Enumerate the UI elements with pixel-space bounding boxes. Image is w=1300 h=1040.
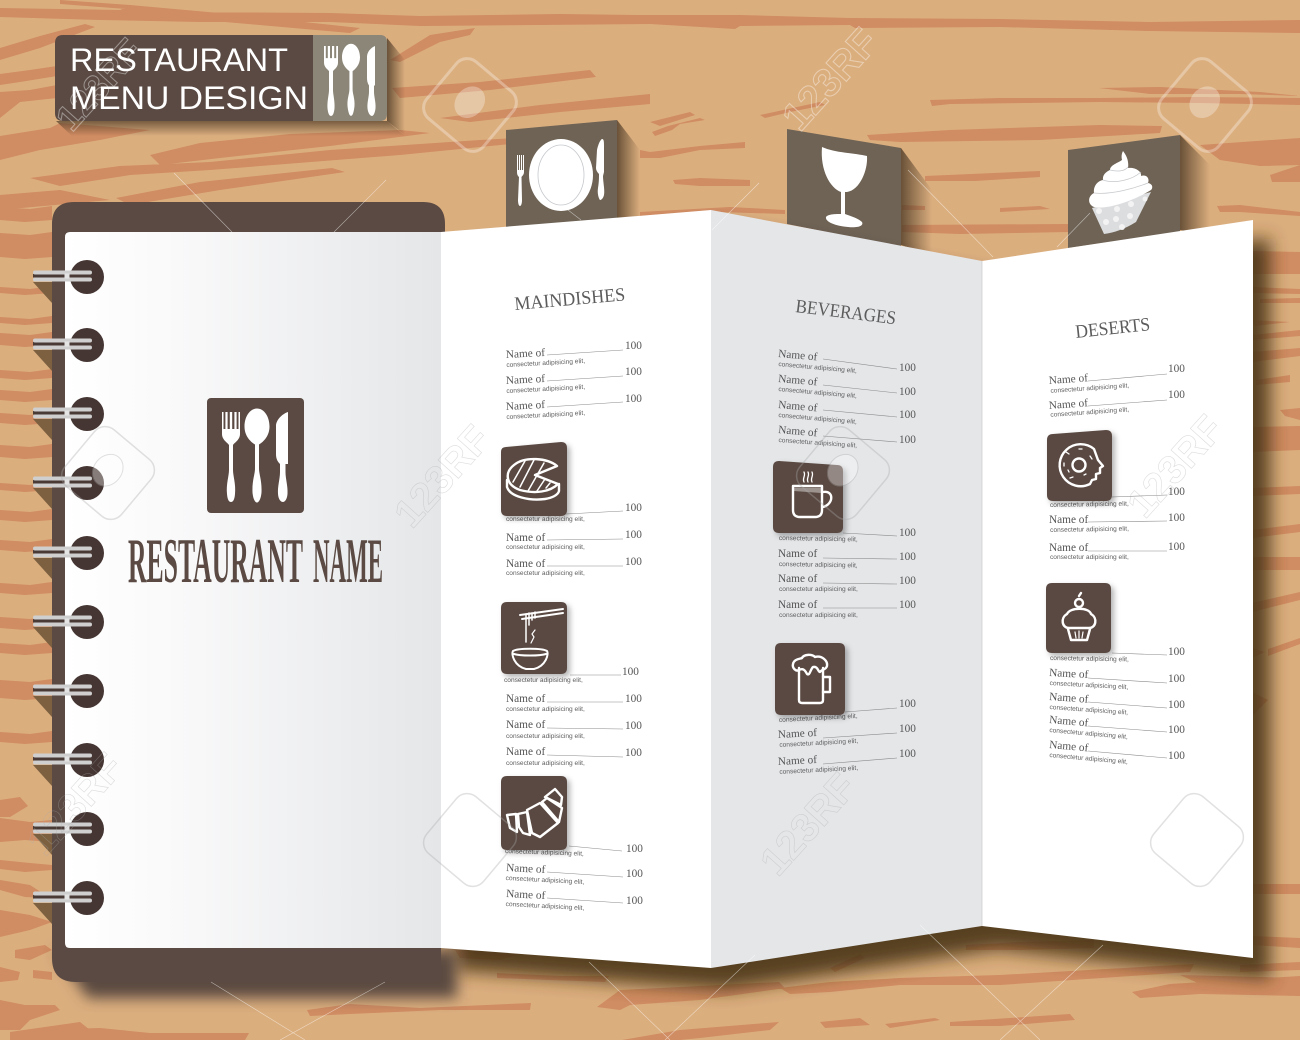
menu item: Name of xyxy=(778,399,818,414)
menu item xyxy=(506,340,642,369)
ring 10 xyxy=(33,881,104,924)
menu item xyxy=(1049,714,1185,741)
ring 3 xyxy=(33,397,104,440)
menu item: 100 xyxy=(626,895,643,907)
menu item: 100 xyxy=(1168,363,1185,375)
menu item: 100 xyxy=(899,748,916,760)
menu item: consectetur adipisicing elit, xyxy=(506,384,585,395)
menu item: consectetur adipisicing elit, xyxy=(778,437,857,450)
menu item: Name of xyxy=(506,888,546,902)
menu item: Name of xyxy=(1049,739,1089,754)
tab: desserts xyxy=(1068,135,1180,248)
menu item: consectetur adipisicing elit, xyxy=(1050,655,1129,663)
watermark egg xyxy=(1145,788,1249,892)
menu item xyxy=(506,529,642,551)
menu item xyxy=(505,888,643,912)
menu item: Name of xyxy=(1049,514,1088,526)
tab shadows xyxy=(617,120,1210,255)
menu item: Name of xyxy=(506,693,545,705)
cover logo xyxy=(207,398,304,513)
heading: beverages: BEVERAGES xyxy=(794,296,897,329)
menu item: 100 xyxy=(899,551,916,563)
watermark text: 123RF xyxy=(1119,407,1232,526)
icon tile: coffee xyxy=(773,461,843,533)
menu item xyxy=(506,366,642,395)
restaurant name: RESTAURANT xyxy=(128,526,303,596)
icon tile: noodles xyxy=(501,602,567,674)
menu item: Name of xyxy=(778,348,818,363)
menu item: 100 xyxy=(1168,512,1185,524)
menu item: 100 xyxy=(899,599,916,611)
menu item xyxy=(505,862,643,886)
menu item: consectetur adipisicing elit, xyxy=(779,612,858,619)
menu cover: NAME xyxy=(313,526,383,596)
tab: beverages xyxy=(787,129,901,247)
icon tile: beer xyxy=(775,643,845,715)
watermark text: 123RF xyxy=(47,31,150,138)
menu item: Name of xyxy=(1049,714,1089,729)
shadow: cover xyxy=(58,950,457,998)
menu item xyxy=(1049,691,1185,717)
watermark egg xyxy=(791,421,895,525)
menu item xyxy=(506,719,642,740)
menu item: Name of xyxy=(1049,667,1089,681)
menu item: 100 xyxy=(899,386,916,398)
menu item: 100 xyxy=(1168,724,1185,736)
menu item xyxy=(778,748,916,776)
watermarks xyxy=(19,20,1257,892)
menu item: consectetur adipisicing elit, xyxy=(1050,526,1129,534)
menu item: consectetur adipisicing elit, xyxy=(506,760,585,767)
shadow: folded panels xyxy=(455,228,1270,990)
menu item xyxy=(1049,739,1185,766)
menu item: Name of xyxy=(506,373,546,387)
menu item: consectetur adipisicing elit, xyxy=(1049,727,1128,741)
menu item: Name of xyxy=(1049,542,1088,554)
menu item: 100 xyxy=(626,843,643,855)
menu item: 100 xyxy=(899,362,916,374)
title text: MENU DESIGN xyxy=(70,80,308,116)
menu item: 100 xyxy=(625,747,642,759)
menu item: 100 xyxy=(899,434,916,446)
heading: desserts: DESERTS xyxy=(1074,314,1151,343)
menu item: consectetur adipisicing elit, xyxy=(1049,752,1128,766)
menu item: consectetur adipisicing elit, xyxy=(779,535,858,543)
menu item: consectetur adipisicing elit, xyxy=(506,706,585,713)
menu item: 100 xyxy=(899,723,916,735)
icon tile: croissant xyxy=(501,776,567,850)
watermark text: 123RF xyxy=(774,20,887,139)
menu item: 100 xyxy=(625,502,642,514)
menu item: consectetur adipisicing elit, xyxy=(505,875,585,886)
menu item xyxy=(506,502,642,523)
menu item xyxy=(506,556,642,577)
menu item xyxy=(1049,667,1185,691)
ring 2 xyxy=(33,328,104,371)
menu item: Name of xyxy=(778,548,817,560)
menu item: Name of xyxy=(506,347,546,361)
icon: wine glass xyxy=(822,147,867,227)
icon tile: cupcake xyxy=(1046,583,1111,653)
menu item: consectetur adipisicing elit, xyxy=(506,358,585,369)
menu item: consectetur adipisicing elit, xyxy=(506,516,585,523)
menu item xyxy=(506,746,642,767)
menu item: consectetur adipisicing elit, xyxy=(779,586,858,593)
menu item xyxy=(1050,486,1185,509)
menu item: 100 xyxy=(899,575,916,587)
menu item xyxy=(778,573,916,593)
spiral rings xyxy=(33,260,104,924)
menu item xyxy=(778,548,916,569)
menu item: consectetur adipisicing elit, xyxy=(1050,501,1129,509)
shadow: title banner xyxy=(56,38,405,136)
menu item: Name of xyxy=(506,558,545,570)
menu item: 100 xyxy=(625,556,642,568)
menu item xyxy=(506,693,642,713)
ring 7 xyxy=(33,674,104,717)
menu item xyxy=(504,666,639,684)
menu item xyxy=(778,399,916,426)
menu item: consectetur adipisicing elit, xyxy=(504,677,583,684)
panel: desserts xyxy=(982,220,1253,958)
menu item xyxy=(1048,389,1185,419)
icon: plate and cutlery xyxy=(517,139,604,211)
menu item: 100 xyxy=(625,340,642,352)
menu item: Name of xyxy=(778,424,818,439)
menu item: 100 xyxy=(625,393,642,405)
menu item: Name of xyxy=(506,862,546,876)
menu item: consectetur adipisicing elit, xyxy=(506,733,585,740)
menu item: Name of xyxy=(778,727,818,741)
icon: cutlery xyxy=(324,44,376,116)
menu item xyxy=(778,599,916,619)
menu item: Name of xyxy=(506,719,545,731)
menu item: 100 xyxy=(622,666,639,678)
menu item xyxy=(778,723,916,749)
panel: main dishes xyxy=(441,210,711,968)
menu item: 100 xyxy=(1168,389,1185,401)
menu item xyxy=(1049,541,1185,561)
menu item xyxy=(506,393,642,421)
menu item: consectetur adipisicing elit, xyxy=(779,713,858,724)
menu item: 100 xyxy=(1168,750,1185,762)
menu item: consectetur adipisicing elit, xyxy=(779,561,858,569)
menu item: consectetur adipisicing elit, xyxy=(778,361,857,375)
menu item: 100 xyxy=(625,529,642,541)
title banner xyxy=(55,35,387,121)
menu item: consectetur adipisicing elit, xyxy=(506,410,585,421)
menu item xyxy=(1048,363,1185,395)
ring 1 xyxy=(33,260,104,303)
menu item xyxy=(1050,646,1185,663)
ring 6 xyxy=(33,605,104,648)
cover page xyxy=(65,232,441,948)
menu item: consectetur adipisicing elit, xyxy=(778,412,857,426)
menu item: 100 xyxy=(899,527,916,539)
menu item: consectetur adipisicing elit, xyxy=(779,765,858,776)
menu item: 100 xyxy=(625,720,642,732)
menu item: Name of xyxy=(778,573,817,585)
ring 5 xyxy=(33,536,104,579)
menu item: 100 xyxy=(1168,646,1185,658)
menu item: 100 xyxy=(1168,486,1185,498)
watermark text: 123RF xyxy=(386,417,499,536)
ring 8 xyxy=(33,743,104,786)
menu item: Name of xyxy=(1048,397,1089,412)
menu item: consectetur adipisicing elit, xyxy=(1050,406,1129,419)
tab: main dishes xyxy=(506,120,617,236)
menu item: consectetur adipisicing elit, xyxy=(1050,554,1129,561)
menu item: Name of xyxy=(1049,691,1089,706)
menu item xyxy=(505,843,643,858)
menu item: 100 xyxy=(625,693,642,705)
menu item xyxy=(779,527,916,543)
menu item: consectetur adipisicing elit, xyxy=(1049,680,1129,691)
menu cover xyxy=(52,202,445,982)
ring 4 xyxy=(33,466,104,509)
watermark egg xyxy=(418,53,522,157)
menu item: Name of xyxy=(506,746,545,758)
menu item: 100 xyxy=(625,366,642,378)
menu item xyxy=(1049,512,1185,534)
menu item: consectetur adipisicing elit, xyxy=(505,848,584,858)
menu item: Name of xyxy=(778,599,817,611)
menu item: 100 xyxy=(626,868,643,880)
watermark egg xyxy=(418,788,522,892)
heading: main dishes: MAINDISHES xyxy=(514,284,626,315)
menu item xyxy=(778,424,916,450)
menu item: consectetur adipisicing elit, xyxy=(779,738,858,749)
menu item: 100 xyxy=(899,698,916,710)
icon tile: donut xyxy=(1047,430,1112,501)
menu item: 100 xyxy=(1168,673,1185,685)
watermark text: 123RF xyxy=(19,745,132,864)
menu item: Name of xyxy=(506,532,545,544)
menu item xyxy=(778,348,916,375)
menu item: 100 xyxy=(1168,699,1185,711)
menu item: consectetur adipisicing elit, xyxy=(778,386,857,400)
menu item: consectetur adipisicing elit, xyxy=(1050,382,1130,395)
menu item: 100 xyxy=(1168,541,1185,553)
title text: RESTAURANT xyxy=(70,42,288,78)
menu item: consectetur adipisicing elit, xyxy=(505,901,585,912)
ring 9 xyxy=(33,812,104,855)
menu item xyxy=(778,373,916,400)
watermark egg xyxy=(1153,53,1257,157)
menu item: Name of xyxy=(506,399,546,413)
menu item: consectetur adipisicing elit, xyxy=(1049,704,1128,717)
icon: cupcake xyxy=(1089,151,1152,234)
menu item: consectetur adipisicing elit, xyxy=(506,544,585,551)
menu item: Name of xyxy=(778,754,818,768)
watermark text: 123RF xyxy=(752,765,865,884)
menu item: 100 xyxy=(899,409,916,421)
menu item xyxy=(779,698,916,724)
icon tile: salmon xyxy=(501,442,567,516)
menu item: consectetur adipisicing elit, xyxy=(506,570,585,577)
menu item: Name of xyxy=(1048,372,1089,387)
menu item: Name of xyxy=(778,373,818,388)
panel: beverages xyxy=(711,210,982,968)
watermark egg xyxy=(56,421,160,525)
